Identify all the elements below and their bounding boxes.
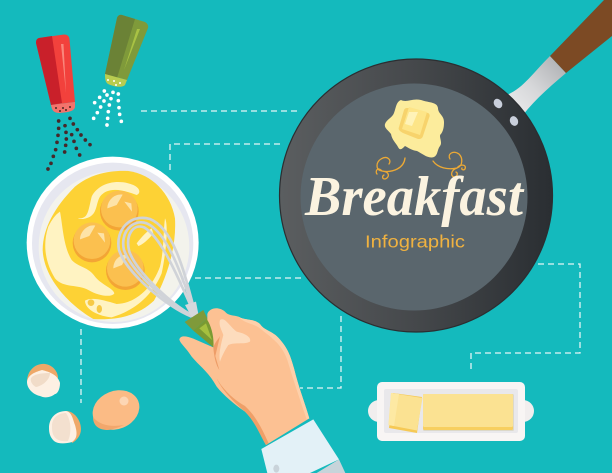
title: Breakfast: Breakfast bbox=[304, 166, 524, 228]
pepper grains bbox=[46, 116, 92, 171]
pan rivets bbox=[492, 97, 520, 127]
hand bbox=[179, 308, 309, 445]
butter dish bbox=[368, 382, 534, 441]
shirt cuff bbox=[261, 419, 345, 473]
egg yolks bbox=[73, 191, 145, 290]
egg white bbox=[45, 182, 167, 317]
frying pan bbox=[280, 0, 612, 332]
butter slices bbox=[388, 393, 422, 433]
melted butter bbox=[385, 100, 444, 157]
whisk wires bbox=[118, 218, 196, 317]
salt grains bbox=[92, 89, 123, 127]
subtitle: Infographic: Infographic bbox=[365, 232, 465, 252]
pan rim bbox=[280, 59, 552, 332]
pan cooking surface bbox=[300, 84, 528, 310]
whisk handle bbox=[185, 310, 215, 347]
eggshell bottom bbox=[49, 411, 81, 443]
whole egg bbox=[87, 383, 145, 437]
dish handles bbox=[368, 400, 534, 422]
red pepper shaker bbox=[36, 34, 75, 113]
decorative swirls bbox=[376, 152, 465, 179]
bowl bbox=[27, 157, 199, 329]
mixing bowl with eggs bbox=[27, 157, 199, 329]
butter block bbox=[423, 394, 514, 431]
dish body bbox=[377, 382, 525, 441]
eggshell top bbox=[27, 364, 60, 397]
beaten egg bbox=[43, 171, 175, 319]
pan handle bbox=[504, 0, 612, 122]
green salt shaker bbox=[105, 15, 148, 87]
